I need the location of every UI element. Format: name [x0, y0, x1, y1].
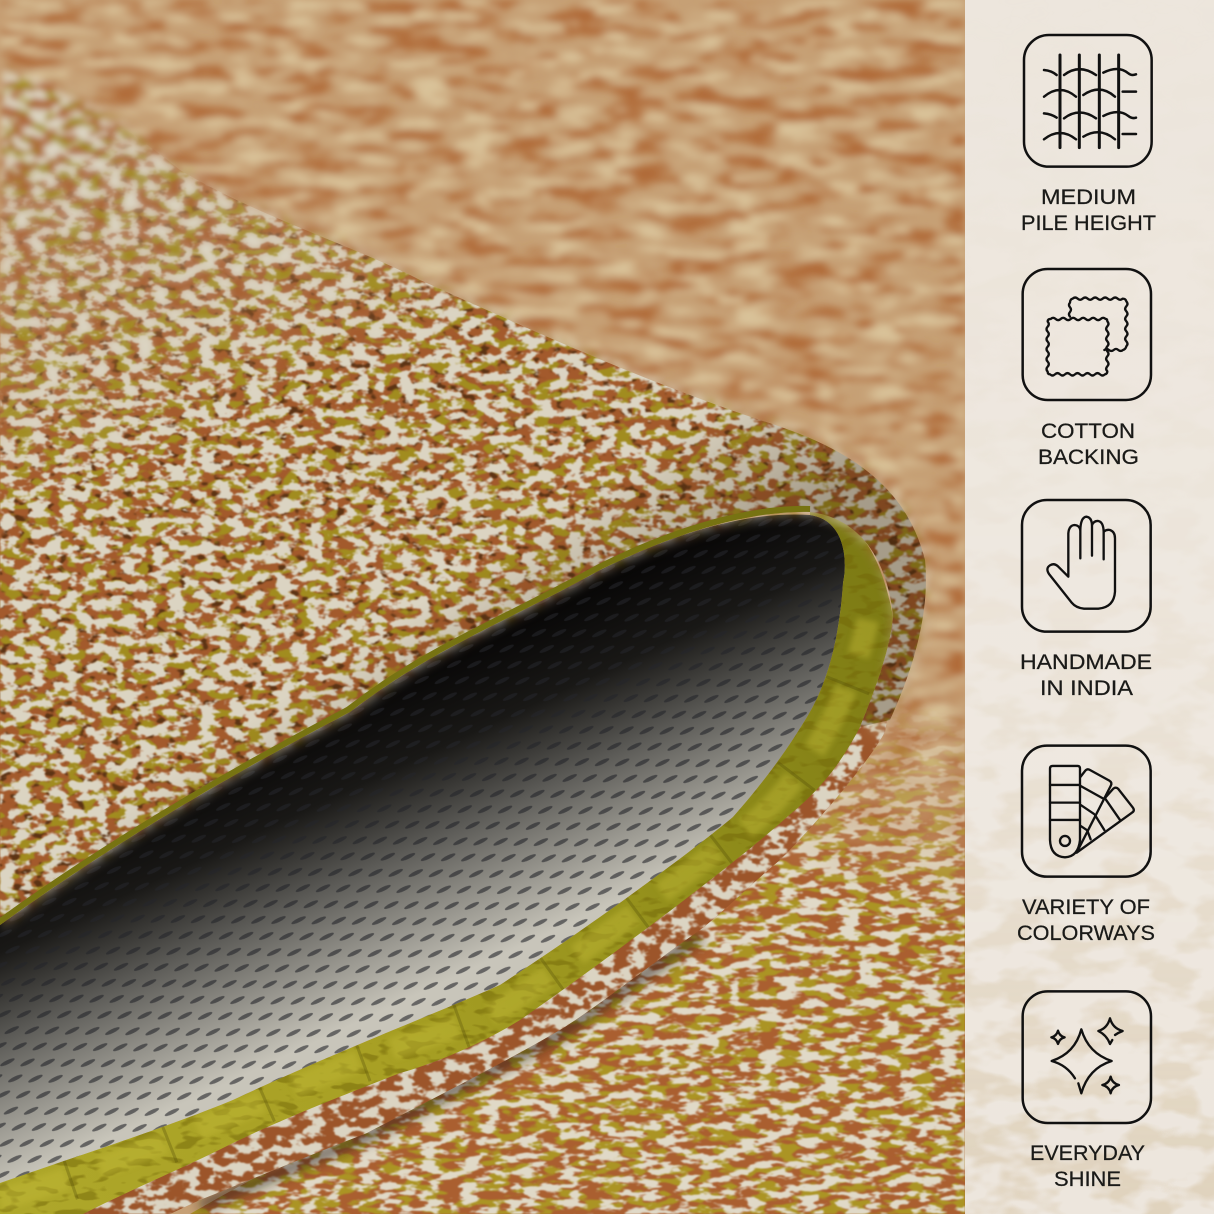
- icon: colour fan deck: [1022, 746, 1151, 877]
- feature: everyday shine: [1023, 991, 1151, 1191]
- label: PILE HEIGHT: [1021, 212, 1156, 235]
- rug underside edge: [83, 720, 887, 1214]
- icon: sparkles: [1023, 991, 1151, 1123]
- label: [1030, 1142, 1145, 1191]
- cotton backing underside: [0, 514, 845, 1184]
- feature: cotton backing: [1023, 269, 1151, 469]
- label: [1020, 651, 1152, 700]
- label: [1038, 420, 1139, 469]
- olive binding band: [0, 500, 910, 1214]
- feature: handmade in india: [1020, 500, 1152, 700]
- rolled rug pile: [0, 67, 933, 931]
- sharp part of the pile: [0, 145, 926, 925]
- label: HANDMADE: [1020, 651, 1152, 674]
- icon: pile height grid: [1024, 35, 1152, 167]
- label: IN INDIA: [1040, 677, 1133, 700]
- label: EVERYDAY: [1030, 1142, 1145, 1165]
- out of focus part of the pile: [0, 67, 933, 931]
- lower rug layer: [190, 718, 965, 1214]
- label: COTTON: [1041, 420, 1135, 443]
- icon: hand: [1022, 500, 1151, 632]
- label: COLORWAYS: [1017, 922, 1155, 945]
- label: MEDIUM: [1041, 186, 1136, 209]
- fold shadow: [200, 936, 700, 1206]
- feature: variety of colorways: [1017, 746, 1155, 945]
- side panel: [965, 0, 1214, 1214]
- label: [1017, 896, 1155, 945]
- label: SHINE: [1054, 1168, 1121, 1191]
- feature: medium pile height: [1021, 35, 1156, 235]
- label: VARIETY OF: [1022, 896, 1150, 919]
- label: [1021, 186, 1156, 235]
- rug background: [0, 0, 965, 1214]
- label: BACKING: [1038, 446, 1139, 469]
- icon: fabric swatches: [1023, 269, 1151, 400]
